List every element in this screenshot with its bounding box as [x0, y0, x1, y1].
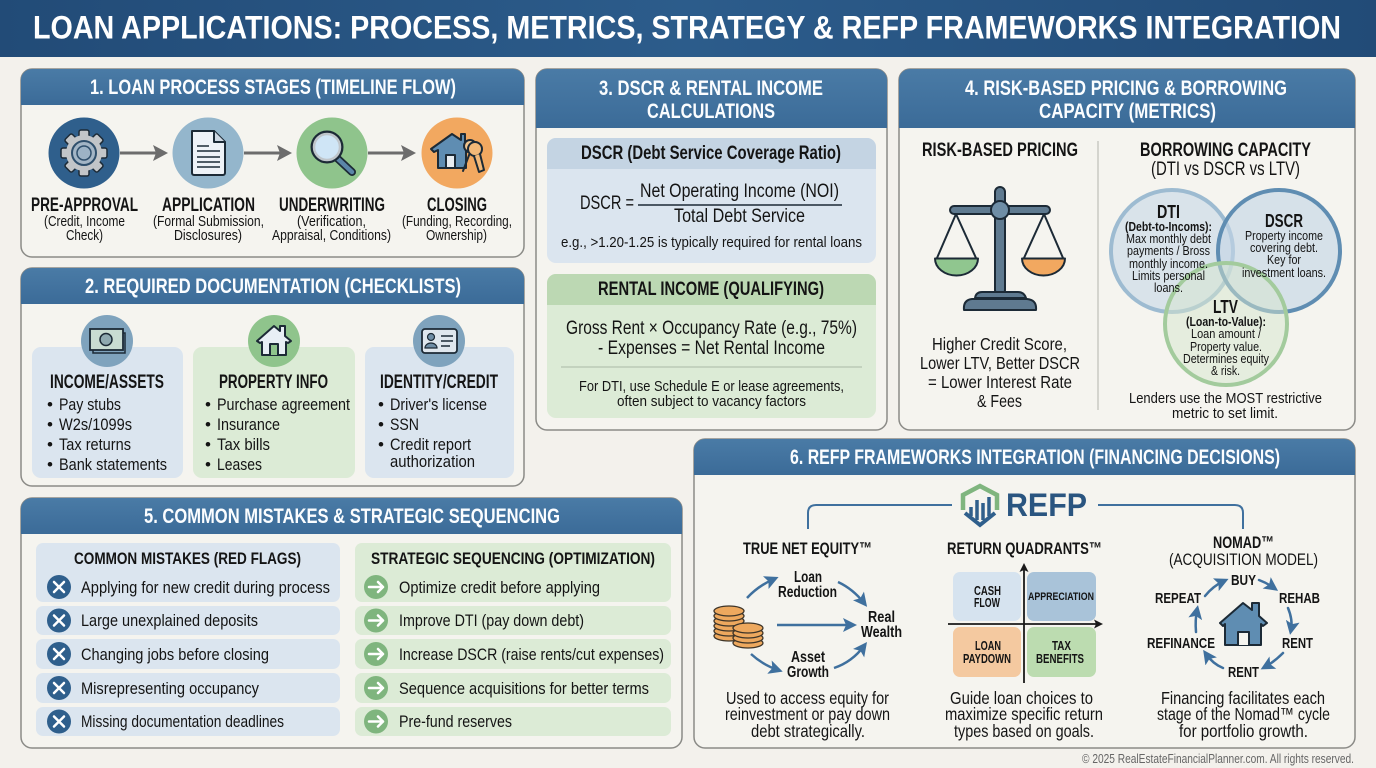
- heading: borrowing capacity: [1140, 140, 1311, 180]
- card: dscr formula: DSCR (Debt Service Coverage Ratio): [581, 143, 841, 164]
- column: common mistakes: Misrepresenting occupancy: [81, 679, 259, 698]
- card: property info: Tax bills: [217, 435, 270, 454]
- icon: id card: [422, 329, 457, 353]
- framework: true net equity: Reduction: [778, 584, 837, 601]
- icon: house: [257, 326, 291, 355]
- stage: closing: Ownership): [426, 227, 487, 244]
- heading: section 2: 2. REQUIRED DOCUMENTATION (CHECKLISTS): [85, 275, 461, 298]
- card: dscr formula: Total Debt Service: [674, 206, 805, 227]
- card: income and assets: Tax returns: [59, 435, 131, 454]
- framework: nomad: BUY: [1231, 572, 1256, 589]
- venn: dti text: monthly income.: [1129, 257, 1208, 271]
- framework: true net equity: [714, 539, 902, 741]
- text: risk-based pricing summary: = Lower Interest Rate: [928, 372, 1072, 392]
- stage: closing: CLOSING: [427, 195, 487, 216]
- card: dscr formula: e.g., >1.20-1.25 is typically required for rental loans: [561, 234, 862, 251]
- venn: dti text: Limits personal: [1132, 269, 1205, 283]
- text: risk-based pricing summary: & Fees: [977, 391, 1022, 411]
- stage: underwriting: [272, 195, 391, 244]
- column: common mistakes: [36, 543, 340, 736]
- card: rental income: For DTI, use Schedule E or lease agreements,: [579, 378, 844, 395]
- venn: ltv text: & risk.: [1211, 364, 1240, 378]
- card: identity and credit: IDENTITY/CREDIT: [380, 372, 498, 393]
- venn: dscr text: investment loans.: [1242, 266, 1326, 280]
- card: income and assets: Pay stubs: [59, 395, 121, 414]
- framework: nomad: REPEAT: [1155, 590, 1201, 607]
- framework: return quadrants: RETURN QUADRANTS™: [947, 539, 1102, 558]
- venn: ltv text: Property value.: [1190, 340, 1262, 354]
- stage: application: Disclosures): [174, 227, 242, 244]
- framework: nomad: RENT: [1228, 664, 1259, 681]
- card: property info: PROPERTY INFO: [219, 372, 328, 393]
- framework: nomad: for portfolio growth.: [1179, 721, 1308, 741]
- framework: true net equity: Used to access equity for: [726, 688, 889, 708]
- card: property info: •: [205, 395, 211, 414]
- panel: 4 risk-based pricing and borrowing capacity: [899, 69, 1355, 430]
- stage: application: (Formal Submission,: [153, 213, 264, 230]
- venn: dti text: DTI: [1157, 201, 1180, 222]
- icon: document: [172, 118, 244, 188]
- stage: underwriting: UNDERWRITING: [279, 195, 385, 216]
- quadrant chart: TAX: [1052, 639, 1072, 653]
- text: risk-based pricing summary: Lower LTV, Better DSCR: [920, 353, 1080, 373]
- heading: section 4: 4. RISK-BASED PRICING & BORROWING: [965, 77, 1287, 100]
- venn: dti text: payments / Bross: [1127, 244, 1210, 258]
- venn: dscr text: [1242, 210, 1326, 280]
- quadrant chart: APPRECIATION: [1028, 591, 1094, 603]
- card: rental income: often subject to vacancy factors: [617, 393, 806, 410]
- venn: ltv text: [1183, 296, 1270, 378]
- framework: return quadrants: types based on goals.: [954, 721, 1094, 741]
- framework: true net equity: Real: [868, 609, 895, 626]
- venn: dti text: loans.: [1154, 281, 1183, 295]
- stage: closing: (Funding, Recording,: [402, 213, 512, 230]
- quadrant chart: PAYDOWN: [963, 652, 1011, 666]
- quadrant chart: FLOW: [974, 596, 1000, 610]
- venn: dscr text: covering debt.: [1250, 241, 1318, 255]
- card: dscr formula: Net Operating Income (NOI): [640, 181, 839, 202]
- text: risk-based pricing summary: [920, 334, 1080, 411]
- card: dscr formula: DSCR =: [580, 193, 634, 214]
- framework: true net equity: Loan: [794, 569, 822, 586]
- card: identity and credit: Driver's license: [390, 395, 487, 414]
- card: property info: [193, 315, 355, 478]
- column: common mistakes: Applying for new credit during process: [81, 578, 330, 597]
- panel: 1 loan process stages: [21, 69, 524, 257]
- text: most restrictive note: [1129, 390, 1322, 422]
- column: strategic sequencing: Optimize credit before applying: [399, 578, 600, 597]
- logo: refp: REFP: [1006, 487, 1087, 523]
- card: income and assets: •: [47, 415, 53, 434]
- icon: nomad house: [1220, 603, 1267, 645]
- column: strategic sequencing: Increase DSCR (raise rents/cut expenses): [399, 645, 664, 664]
- framework: nomad: REFINANCE: [1147, 635, 1215, 652]
- framework: nomad: stage of the Nomad™ cycle: [1157, 704, 1330, 724]
- card: income and assets: Bank statements: [59, 455, 167, 474]
- framework: true net equity: TRUE NET EQUITY™: [743, 539, 872, 558]
- card: rental income: - Expenses = Net Rental Income: [598, 338, 825, 359]
- stage: pre-approval: [31, 195, 138, 244]
- icon: house and keys: [422, 118, 492, 188]
- column: strategic sequencing: Sequence acquisitions for better terms: [399, 679, 649, 698]
- stage: application: APPLICATION: [162, 195, 255, 216]
- connector: refp to true net equity: [808, 505, 952, 529]
- venn: ltv text: Determines equity: [1183, 352, 1270, 366]
- text: most restrictive note: Lenders use the MOST restrictive: [1129, 390, 1322, 407]
- framework: return quadrants: maximize specific return: [945, 704, 1103, 724]
- quadrant chart: LOAN: [975, 639, 1001, 653]
- arrow: underwriting to closing: [368, 152, 411, 154]
- framework: nomad: REHAB: [1279, 590, 1320, 607]
- stage: pre-approval: PRE-APPROVAL: [31, 195, 138, 216]
- card: identity and credit: Credit report: [390, 435, 471, 454]
- text: risk-based pricing summary: Higher Credit Score,: [932, 334, 1067, 354]
- card: property info: •: [205, 455, 211, 474]
- card: income and assets: •: [47, 435, 53, 454]
- heading: section 5: 5. COMMON MISTAKES & STRATEGIC SEQUENCING: [144, 505, 560, 528]
- card: income and assets: [32, 315, 183, 478]
- icon: balance scale: [935, 187, 1065, 310]
- framework: nomad: NOMAD™: [1213, 533, 1274, 552]
- card: property info: Insurance: [217, 415, 280, 434]
- arrows: nomad cycle: [1196, 580, 1292, 668]
- icon: magnifier: [296, 118, 368, 188]
- card: identity and credit: authorization: [390, 452, 475, 471]
- heading: section 4: CAPACITY (METRICS): [1039, 100, 1216, 123]
- heading: risk-based pricing: RISK-BASED PRICING: [922, 140, 1078, 161]
- framework: nomad: [1147, 533, 1330, 741]
- stage: underwriting: Appraisal, Conditions): [272, 227, 391, 244]
- venn: dscr text: Property income: [1245, 229, 1323, 243]
- venn: ltv text: Loan amount /: [1191, 327, 1261, 341]
- venn: dti text: [1125, 201, 1212, 295]
- card: property info: •: [205, 435, 211, 454]
- icon: coin stacks: [714, 606, 763, 648]
- framework: true net equity: reinvestment or pay down: [725, 704, 890, 724]
- card: dscr formula: [547, 138, 876, 263]
- card: property info: •: [205, 415, 211, 434]
- framework: true net equity: Asset: [791, 649, 826, 666]
- panel: 5 common mistakes and strategic sequencing: [21, 498, 682, 748]
- framework: nomad: (ACQUISITION MODEL): [1169, 550, 1318, 569]
- column: strategic sequencing: Improve DTI (pay down debt): [399, 611, 584, 630]
- text: most restrictive note: metric to set limit.: [1172, 405, 1278, 422]
- stage: closing: [402, 195, 512, 244]
- card: identity and credit: [365, 315, 514, 478]
- framework: true net equity: Wealth: [861, 624, 902, 641]
- venn: dti text: Max monthly debt: [1126, 232, 1211, 246]
- arrows: equity flows to wealth: [747, 579, 864, 670]
- stage: pre-approval: Check): [66, 227, 103, 244]
- framework: true net equity: debt strategically.: [751, 721, 865, 741]
- quadrant chart: BENEFITS: [1036, 652, 1084, 666]
- venn: ltv text: (Loan-to-Value):: [1186, 315, 1266, 329]
- column: strategic sequencing: STRATEGIC SEQUENCING (OPTIMIZATION): [371, 549, 655, 568]
- framework: nomad: Financing facilitates each: [1161, 688, 1325, 708]
- panel: 3 dscr and rental income: [536, 69, 887, 430]
- icon: cash: [90, 329, 125, 353]
- venn diagram: dti dscr ltv: [1111, 190, 1340, 385]
- card: income and assets: INCOME/ASSETS: [50, 372, 164, 393]
- column: common mistakes: Missing documentation deadlines: [81, 712, 284, 731]
- arrow: pre-approval to application: [120, 152, 163, 154]
- card: rental income: RENTAL INCOME (QUALIFYING): [598, 279, 824, 300]
- card: property info: Leases: [217, 455, 262, 474]
- venn: dti text: (Debt-to-Incoms):: [1125, 220, 1212, 234]
- card: identity and credit: •: [378, 395, 384, 414]
- card: identity and credit: SSN: [390, 415, 419, 434]
- stage: application: [153, 195, 264, 244]
- heading: section 4: [965, 77, 1287, 123]
- venn: ltv text: LTV: [1213, 296, 1238, 317]
- heading: borrowing capacity: BORROWING CAPACITY: [1140, 140, 1311, 161]
- card: rental income: [547, 274, 876, 418]
- heading: section 1: 1. LOAN PROCESS STAGES (TIMELINE FLOW): [90, 76, 456, 99]
- heading: section 3: [599, 77, 823, 123]
- heading: section 3: 3. DSCR & RENTAL INCOME: [599, 77, 823, 100]
- connector: refp to nomad: [1098, 505, 1243, 529]
- column: common mistakes: Large unexplained deposits: [81, 611, 258, 630]
- framework: return quadrants: [945, 539, 1103, 741]
- logo: refp: [963, 486, 1087, 525]
- column: strategic sequencing: Pre-fund reserves: [399, 712, 512, 731]
- venn: dscr text: DSCR: [1265, 210, 1303, 231]
- stage: pre-approval: (Credit, Income: [44, 213, 125, 230]
- title banner: [0, 0, 1376, 57]
- quadrant chart: [948, 566, 1100, 683]
- card: property info: Purchase agreement: [217, 395, 350, 414]
- card: income and assets: •: [47, 455, 53, 474]
- panel: 2 required documentation: [21, 268, 524, 486]
- panel: 6 refp frameworks integration: [694, 439, 1355, 748]
- card: identity and credit: •: [378, 415, 384, 434]
- heading: borrowing capacity: (DTI vs DSCR vs LTV): [1151, 159, 1300, 180]
- column: common mistakes: Changing jobs before closing: [81, 645, 269, 664]
- column: common mistakes: COMMON MISTAKES (RED FLAGS): [74, 549, 301, 568]
- card: identity and credit: •: [378, 435, 384, 454]
- framework: nomad: RENT: [1282, 635, 1313, 652]
- framework: return quadrants: Guide loan choices to: [950, 688, 1093, 708]
- venn: dscr text: Key for: [1267, 253, 1301, 267]
- card: income and assets: W2s/1099s: [59, 415, 132, 434]
- quadrant chart: CASH: [974, 584, 1001, 598]
- card: income and assets: •: [47, 395, 53, 414]
- heading: section 3: CALCULATIONS: [647, 100, 775, 123]
- arrow: application to underwriting: [244, 152, 287, 154]
- stage: underwriting: (Verification,: [297, 213, 366, 230]
- card: rental income: Gross Rent × Occupancy Rate (e.g., 75%): [566, 318, 857, 339]
- framework: true net equity: Growth: [787, 664, 829, 681]
- column: strategic sequencing: [355, 543, 671, 736]
- icon: gear: [48, 118, 120, 188]
